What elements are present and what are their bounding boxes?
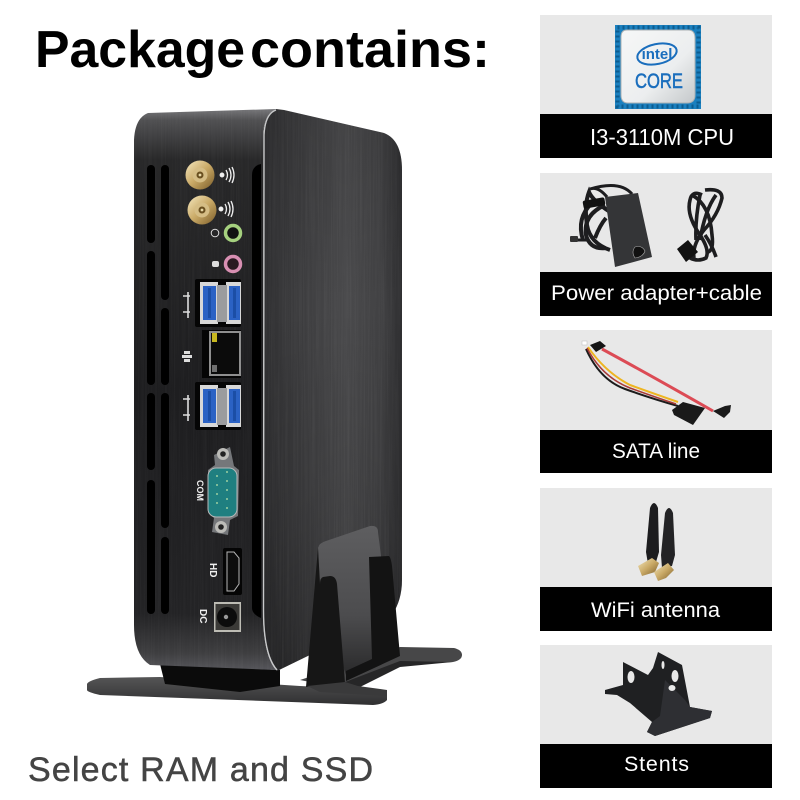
panel: SATA line	[540, 330, 772, 473]
COM serial port: COM	[195, 480, 205, 501]
stand base plates	[87, 647, 462, 705]
label bar	[540, 272, 772, 316]
title: contains:	[250, 21, 490, 79]
ethernet port	[182, 330, 241, 378]
icon: intel core badge	[615, 25, 701, 109]
panel: stents: Stents	[624, 752, 689, 776]
tagline: Select RAM and SSD	[28, 751, 373, 789]
icon: antennas	[638, 503, 675, 581]
icon: intel core badge: CORE	[635, 70, 683, 93]
icon: intel core badge: intel	[642, 46, 672, 63]
panel: SATA line: SATA line	[612, 439, 700, 463]
panel: WiFi antenna: WiFi antenna	[591, 598, 720, 622]
panel: power adapter: Power adapter+cable	[551, 281, 762, 305]
stand upright	[306, 526, 400, 696]
label bar	[540, 744, 772, 788]
panel: stents	[540, 645, 772, 788]
silver edge	[264, 110, 277, 670]
label bar	[540, 430, 772, 473]
title: Package	[35, 21, 245, 79]
wifi antenna connectors	[186, 160, 234, 224]
COM serial port	[195, 447, 239, 535]
icon: stand	[605, 652, 712, 736]
USB ports top	[183, 279, 241, 327]
icon: SATA cable	[582, 341, 731, 425]
panel: CPU	[540, 15, 772, 158]
DC power jack	[197, 602, 241, 632]
USB ports bottom	[183, 382, 241, 430]
label bar	[540, 114, 772, 158]
HDMI port: HD	[207, 563, 218, 577]
icon: adapter and cords	[570, 185, 722, 267]
computer front panel	[134, 109, 277, 670]
panel: power adapter	[540, 173, 772, 316]
audio ports	[211, 226, 240, 272]
computer side panel	[263, 109, 402, 671]
panel: CPU: I3-3110M CPU	[590, 124, 734, 150]
label bar	[540, 587, 772, 631]
DC power jack: DC	[197, 609, 208, 623]
panel: WiFi antenna	[540, 488, 772, 631]
vent slots	[147, 164, 261, 618]
product: mini PC on stand	[87, 109, 462, 705]
HDMI port	[207, 548, 242, 595]
